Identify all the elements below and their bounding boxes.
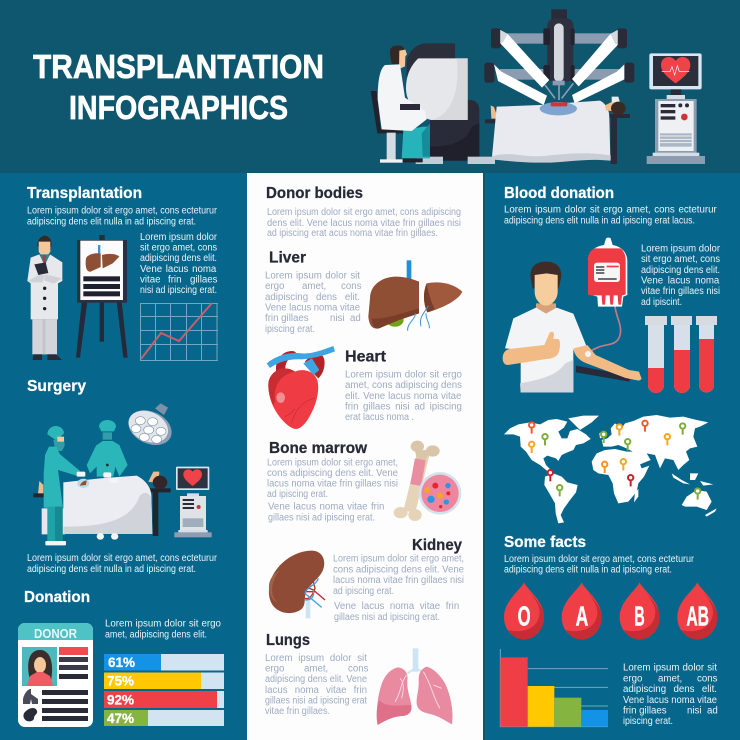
side text: Vene lacus noma	[641, 276, 720, 286]
intro text: dens elit. Vene lacus noma vitae frin gillaes nisi	[267, 218, 461, 229]
panel: blood donation	[503, 185, 721, 393]
liver section: nisi	[330, 313, 345, 324]
intro text: Lorem ipsum dolor sit ergo amet, cons ecteturur	[504, 204, 717, 216]
kidney section: lacus noma vitae frin gillaes nisi	[333, 575, 464, 586]
heart section	[267, 346, 462, 429]
intro text: adipiscing dens elit nulla in ad ipiscing erat.	[27, 216, 196, 228]
donor card	[18, 623, 93, 727]
panel: surgery	[27, 378, 218, 575]
icon: liver	[368, 260, 462, 331]
side text: gillaes	[190, 274, 218, 286]
bar 47%: 47%	[107, 711, 134, 726]
caption: adipiscing dens elit nulla in ad ipiscing erat.	[27, 564, 196, 575]
kidney section: ad ipiscing erat.	[333, 586, 394, 597]
side text	[623, 662, 718, 727]
surgeon right	[87, 420, 128, 483]
lungs section	[265, 632, 453, 725]
bone marrow section: lacus noma vitae frin gillaes nisi	[267, 478, 398, 490]
header band	[0, 0, 740, 173]
lungs section: lacus noma vitae frin	[265, 685, 367, 696]
lungs section: vitae frin gillaes.	[265, 706, 330, 717]
easel with liver chart	[76, 235, 128, 358]
continents	[504, 415, 717, 523]
donor card: DONOR	[34, 626, 78, 641]
side text: nisi	[687, 706, 702, 716]
liver section: Liver	[269, 250, 306, 266]
side text: Vene lacus noma vitae	[623, 695, 717, 706]
icon: heart	[267, 346, 335, 429]
intro text	[504, 204, 717, 226]
bone marrow section: Lorem ipsum dolor sit ergo amet,	[267, 458, 398, 468]
intro text: adipiscing dens elit nulla in ad ipiscing erat lacus.	[504, 216, 695, 226]
bone marrow section: gillaes nisi ad ipiscing erat.	[268, 512, 375, 524]
side text: ad ipiscint.	[641, 297, 682, 308]
heart section: elit. Vene lacus noma vitae	[345, 391, 461, 402]
console	[406, 43, 495, 164]
blood type drops	[504, 582, 717, 639]
donor man with arm	[503, 262, 642, 392]
intro text: Lorem ipsum dolor sit ergo amet, cons adipiscing	[267, 207, 461, 218]
side text: ad	[707, 706, 718, 716]
side text: ipiscing erat.	[623, 716, 673, 727]
bar 75%	[104, 672, 224, 689]
lamp	[123, 403, 177, 452]
drop B	[620, 582, 660, 639]
intro text	[27, 206, 218, 228]
side text: Vene lacus noma	[140, 264, 217, 275]
text: Lorem ipsum dolor sit ergo	[105, 618, 221, 630]
panel: donor bodies	[265, 185, 464, 725]
text: amet, adipiscing dens elit.	[105, 630, 207, 640]
heading: Donor bodies	[266, 185, 363, 202]
liver section: Vene lacus noma vitae	[265, 302, 360, 314]
text: adipiscing dens elit nulla in ad ipiscing erat.	[504, 564, 672, 576]
drop A: A	[576, 600, 588, 631]
side text: adipiscing dens elit.	[641, 265, 720, 276]
bone marrow section: ad ipiscing erat.	[267, 489, 328, 500]
monitor	[647, 53, 705, 164]
patient under drape	[491, 97, 626, 163]
lungs section: gillaes nisi ad ipiscing erat	[265, 696, 367, 706]
bone marrow section: Vene lacus noma vitae frin	[268, 502, 384, 512]
icon: bone	[394, 441, 461, 521]
bone marrow section: cons adipiscing dens elit. Vene	[267, 468, 398, 479]
bar 92%: 92%	[107, 692, 134, 708]
bone marrow section: Bone marrow	[269, 440, 368, 457]
title: TRANSPLANTATION	[33, 48, 324, 85]
side text: cons	[697, 674, 718, 684]
heading: Surgery	[27, 378, 86, 395]
heart section: amet, cons adipiscing dens	[345, 380, 462, 391]
heart section: Lorem ipsum dolor sit ergo	[345, 370, 462, 380]
panel: some facts	[500, 534, 718, 727]
text	[105, 618, 221, 640]
heart section: frin gillaes nisi ad ipiscing	[345, 402, 462, 412]
side text	[641, 244, 721, 308]
text: Lorem ipsum dolor sit ergo amet, cons ecteturur	[504, 554, 695, 565]
bar chart	[500, 649, 608, 727]
bar 75%: 75%	[107, 674, 134, 688]
table and patient	[33, 472, 171, 540]
bar 92%	[104, 691, 224, 708]
side text: Lorem ipsum dolor sit	[623, 662, 717, 674]
lungs section: ergo	[265, 664, 284, 674]
bar 61%	[104, 654, 224, 670]
monitor	[174, 467, 212, 537]
lungs section: adipiscing dens elit. Vene	[265, 674, 367, 685]
heading: Transplantation	[27, 185, 142, 202]
bone marrow section	[267, 440, 461, 524]
center white panel	[247, 173, 484, 740]
drop O	[504, 582, 544, 639]
side text	[140, 232, 218, 296]
caption: Lorem ipsum dolor sit ergo amet, cons ecteturur	[27, 553, 218, 564]
world map with pins	[504, 415, 717, 523]
icon: lungs	[377, 648, 453, 725]
bar 61%: 61%	[108, 655, 135, 670]
doctor illustration	[27, 236, 62, 360]
heart section: erat lacus noma .	[345, 412, 414, 423]
panel: transplantation	[27, 185, 218, 361]
kidney section: Kidney	[412, 537, 462, 554]
drop AB: AB	[686, 600, 709, 631]
side text: adipiscing dens elit.	[623, 684, 717, 695]
chair	[371, 91, 411, 163]
title	[33, 48, 324, 126]
lungs section: cons	[348, 664, 369, 674]
surgeon left	[44, 426, 85, 545]
side text: nisi ad ipiscing erat.	[140, 285, 217, 296]
table	[485, 114, 630, 164]
illustration: robotic surgery	[371, 9, 705, 164]
bar 47%	[104, 710, 224, 726]
operating room illustration	[33, 403, 212, 545]
drop A	[562, 582, 602, 639]
side text: amet,	[658, 674, 682, 684]
drop AB	[677, 582, 717, 639]
icon: kidney	[269, 551, 325, 618]
lungs section: amet,	[304, 664, 328, 674]
liver section: adipiscing dens elit.	[265, 292, 360, 303]
lungs section: Lungs	[266, 632, 310, 649]
side text: sit ergo amet, cons	[641, 254, 720, 265]
liver section: ad	[350, 313, 361, 324]
liver section: ergo	[265, 281, 284, 292]
heading: Blood donation	[504, 185, 614, 202]
robot column and arms	[484, 9, 634, 105]
side text: vitae	[140, 274, 160, 286]
intro text: Lorem ipsum dolor sit ergo amet, cons ecteturur	[27, 206, 218, 216]
kidney section: gillaes nisi ad ipiscing erat.	[334, 612, 440, 623]
text	[504, 554, 695, 576]
kidney section: Vene lacus noma vitae frin	[334, 601, 459, 612]
caption	[27, 553, 218, 575]
drop O: O	[518, 600, 531, 631]
liver section: cons	[341, 281, 362, 292]
heading: Some facts	[504, 534, 586, 551]
intro text: ad ipiscing erat acus noma vitae frin gillaes.	[267, 228, 438, 239]
line chart	[140, 303, 218, 361]
liver section: Lorem ipsum dolor sit	[265, 270, 360, 282]
liver section: ipiscing erat.	[265, 324, 315, 335]
liver section: frin gillaes	[265, 313, 309, 324]
drop B: B	[634, 600, 645, 631]
side text: ergo	[623, 674, 642, 684]
side text: adipiscing dens elit.	[140, 253, 217, 264]
pins	[529, 421, 700, 500]
side text: vitae frin gillaes nisi	[641, 286, 720, 297]
blood bag	[588, 238, 627, 307]
lungs section: Lorem ipsum dolor sit	[265, 653, 367, 664]
kidney section: Lorem ipsum dolor sit ergo amet,	[333, 554, 464, 564]
side text: frin gillaes	[623, 706, 667, 716]
title: INFOGRAPHICS	[69, 89, 288, 126]
heading: Donation	[24, 589, 90, 606]
intro text	[267, 207, 461, 239]
side text: Lorem ipsum dolor	[140, 232, 218, 243]
right edge of white panel	[483, 173, 485, 740]
side text: sit ergo amet, cons	[140, 242, 217, 254]
side text: Lorem ipsum dolor	[641, 244, 721, 254]
heart section: Heart	[345, 348, 387, 366]
test tubes	[645, 316, 717, 393]
liver section: amet,	[302, 281, 326, 292]
panel: donation	[18, 589, 224, 727]
kidney section	[269, 537, 464, 623]
kidney section: cons adipiscing dens elit. Vene	[333, 564, 464, 576]
liver section	[265, 250, 462, 335]
side text: frin	[168, 274, 181, 286]
surgeon at console	[378, 46, 430, 162]
